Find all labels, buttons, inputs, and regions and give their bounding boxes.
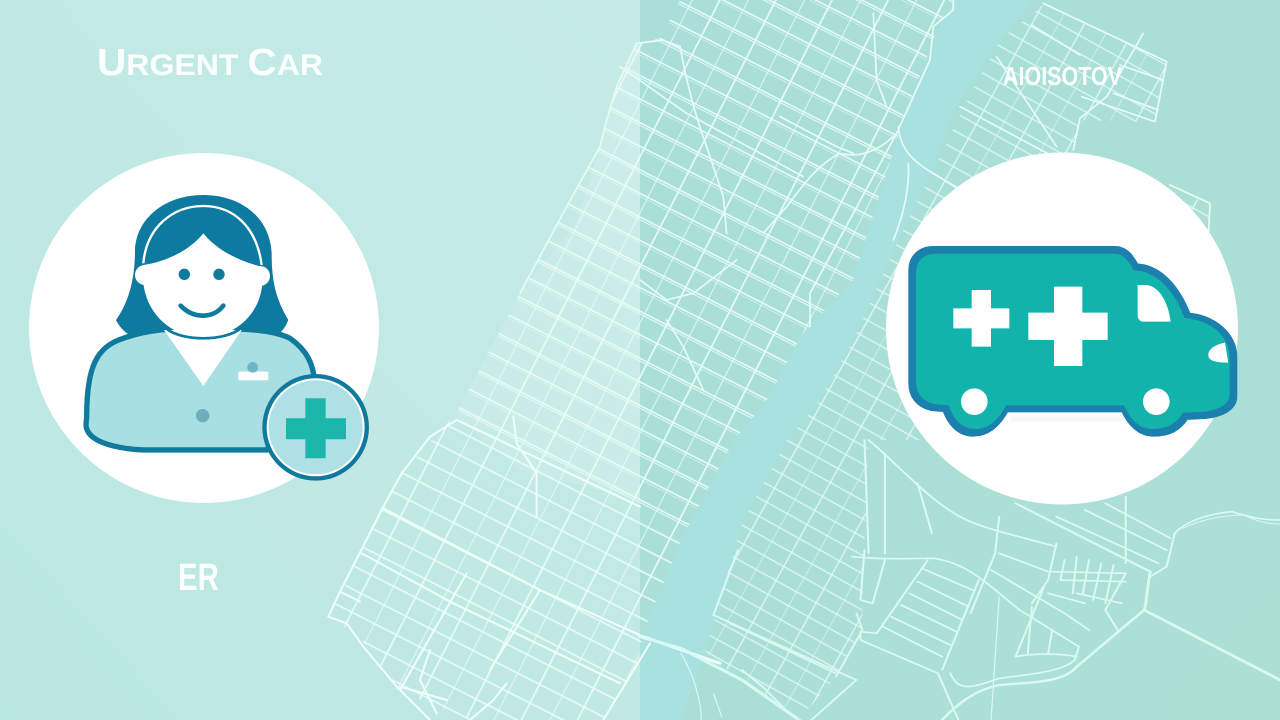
icon: nurse with medical badge <box>86 195 369 481</box>
upper west shore and winding roads <box>520 0 960 390</box>
uniform button <box>196 409 209 422</box>
panel: right background <box>640 0 1280 720</box>
heading: top right label: AIOISOTOV <box>1003 61 1123 91</box>
headlight <box>1208 343 1228 363</box>
nurse hair <box>116 195 288 340</box>
small white cross <box>953 290 1009 347</box>
panel: right white circle <box>886 152 1238 504</box>
nurse uniform <box>86 328 315 450</box>
panel: left background <box>0 0 640 720</box>
icon: ambulance <box>913 251 1232 432</box>
front wheel <box>1143 388 1170 415</box>
river <box>640 0 1033 720</box>
street map <box>300 0 1280 720</box>
rear wheel <box>961 388 988 415</box>
medical cross badge <box>262 374 369 481</box>
heading: urgent care: URGENT CAR <box>97 42 323 84</box>
label: ER: ER <box>178 557 219 599</box>
name badge <box>238 362 268 380</box>
panel: left white circle <box>29 153 379 503</box>
nurse face <box>135 206 270 338</box>
uniform collar <box>164 330 242 386</box>
cab window <box>1138 285 1171 322</box>
large white cross <box>1028 287 1108 366</box>
north east neighbourhood <box>960 3 1210 240</box>
south east neighbourhood and highways <box>640 440 1280 720</box>
west shore and arterials <box>328 417 720 720</box>
